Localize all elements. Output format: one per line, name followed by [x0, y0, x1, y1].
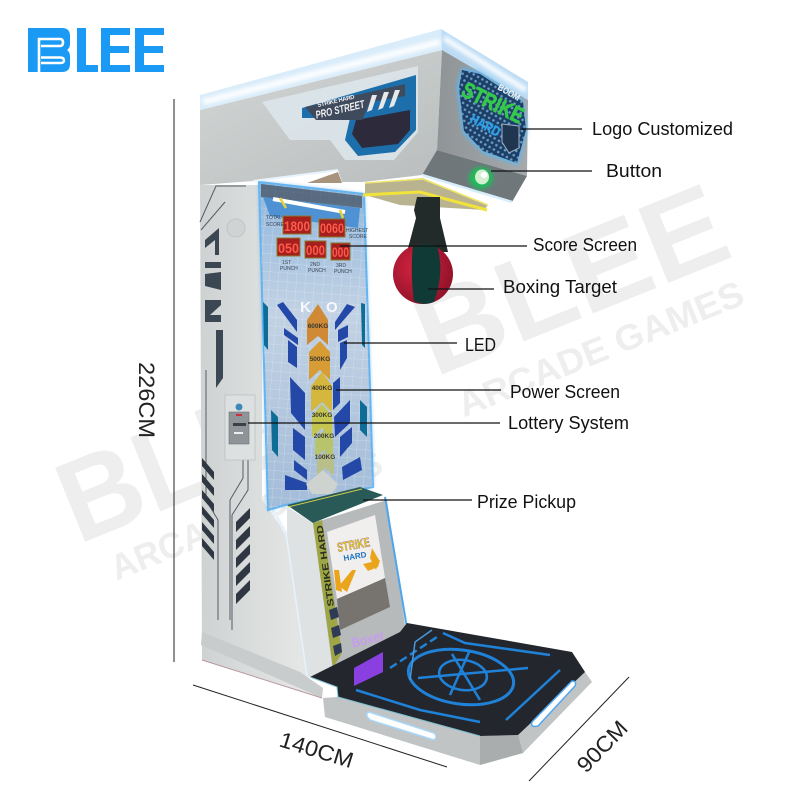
front badge: STRIKE HARD [317, 94, 356, 109]
body chevron stripes [202, 458, 250, 604]
score captions: TOTAL [266, 215, 282, 221]
score captions: 2ND [310, 262, 320, 268]
right face [437, 50, 528, 176]
KO lights: O [326, 299, 338, 316]
score screen displays: 0060 [320, 220, 344, 236]
prize pickup cabinet [287, 487, 407, 677]
score captions: PUNCH [308, 268, 326, 274]
cabinet side strip [313, 520, 342, 668]
boxing target [393, 197, 453, 304]
score screen displays [277, 216, 350, 260]
prize pickup cabinet: STRIKE [336, 534, 371, 555]
power meter arrows: 300KG [312, 412, 332, 419]
blue circuit panels [277, 302, 362, 490]
arcade machine [200, 29, 592, 765]
dimension: width [193, 685, 447, 773]
logo customized sign: BOOM [496, 82, 522, 103]
power meter arrows: 500KG [310, 356, 330, 363]
top housing [200, 29, 528, 210]
platform light bars [367, 712, 436, 740]
score captions [266, 215, 368, 275]
prize pickup cabinet: HARD [343, 550, 367, 563]
logo customized sign [457, 68, 528, 165]
score captions: PUNCH [280, 266, 298, 272]
power meter arrows [306, 304, 338, 494]
lower slanted face [422, 150, 527, 202]
score screen displays: 1800 [284, 218, 310, 234]
logo customized sign: STRIKE [458, 77, 528, 128]
callout: Prize Pickup: Prize Pickup [477, 492, 576, 512]
watermark: lower left BLEE Arcade Games: ARCADE GAMES [104, 442, 388, 588]
teal side channels [263, 302, 367, 457]
body side lettering [205, 228, 223, 388]
dimension: depth: 90CM [572, 716, 633, 777]
power meter arrows: 100KG [315, 454, 335, 461]
score screen displays: 000 [306, 242, 325, 258]
logo: BLEE [28, 28, 164, 72]
logo customized sign: HARD [468, 111, 503, 140]
reflected neon [354, 652, 383, 686]
boxer neon logo: Boxer [350, 627, 386, 651]
callout: Button: Button [606, 161, 662, 181]
top strip [200, 29, 442, 110]
callout: Lottery System: Lottery System [508, 413, 629, 433]
score captions: HIGHEST [346, 228, 368, 234]
KO lights: K [300, 299, 311, 316]
lottery ticket panel [225, 395, 255, 460]
power meter arrows: 200KG [314, 433, 334, 440]
score screen displays: 050 [278, 240, 299, 256]
watermark: lower left BLEE Arcade Games: BLEE [39, 335, 366, 568]
callout: Score Screen: Score Screen [533, 235, 637, 255]
watermark: upper right BLEE Arcade Games: ARCADE GAMES [451, 273, 750, 425]
dimension: height: 226CM [134, 362, 159, 438]
yellow sensor plate [363, 178, 488, 210]
body decals [200, 186, 248, 630]
score captions: PUNCH [334, 269, 352, 275]
callout: LED: LED [465, 335, 496, 355]
prize pickup cabinet: STRIKE HARD [315, 524, 336, 607]
start button [469, 167, 493, 189]
speaker grille [227, 219, 245, 237]
dimension: width: 140CM [277, 727, 357, 773]
front badge [262, 66, 418, 160]
score screen displays: 000 [332, 244, 349, 260]
power meter arrows: 600KG [308, 323, 328, 330]
KO lights [300, 299, 338, 316]
callout: Boxing Target: Boxing Target [503, 277, 617, 297]
cabinet screen [327, 515, 385, 599]
score captions: 1ST [282, 260, 291, 266]
power meter arrows: 400KG [312, 385, 332, 392]
score captions: SCORE [266, 222, 284, 228]
front badge: PRO STREET [314, 98, 367, 122]
floor target pattern [356, 630, 560, 722]
platform base [310, 623, 592, 765]
score captions: SCORE [349, 234, 367, 240]
callout: Power Screen: Power Screen [510, 382, 620, 402]
callout: Logo Customized: Logo Customized [592, 119, 733, 139]
dimension: depth [529, 677, 633, 781]
watermark: upper right BLEE Arcade Games: BLEE [395, 158, 745, 401]
machine column body [200, 185, 323, 698]
front face [200, 50, 442, 185]
score captions: 3RD [336, 263, 346, 269]
main screen [259, 182, 373, 510]
